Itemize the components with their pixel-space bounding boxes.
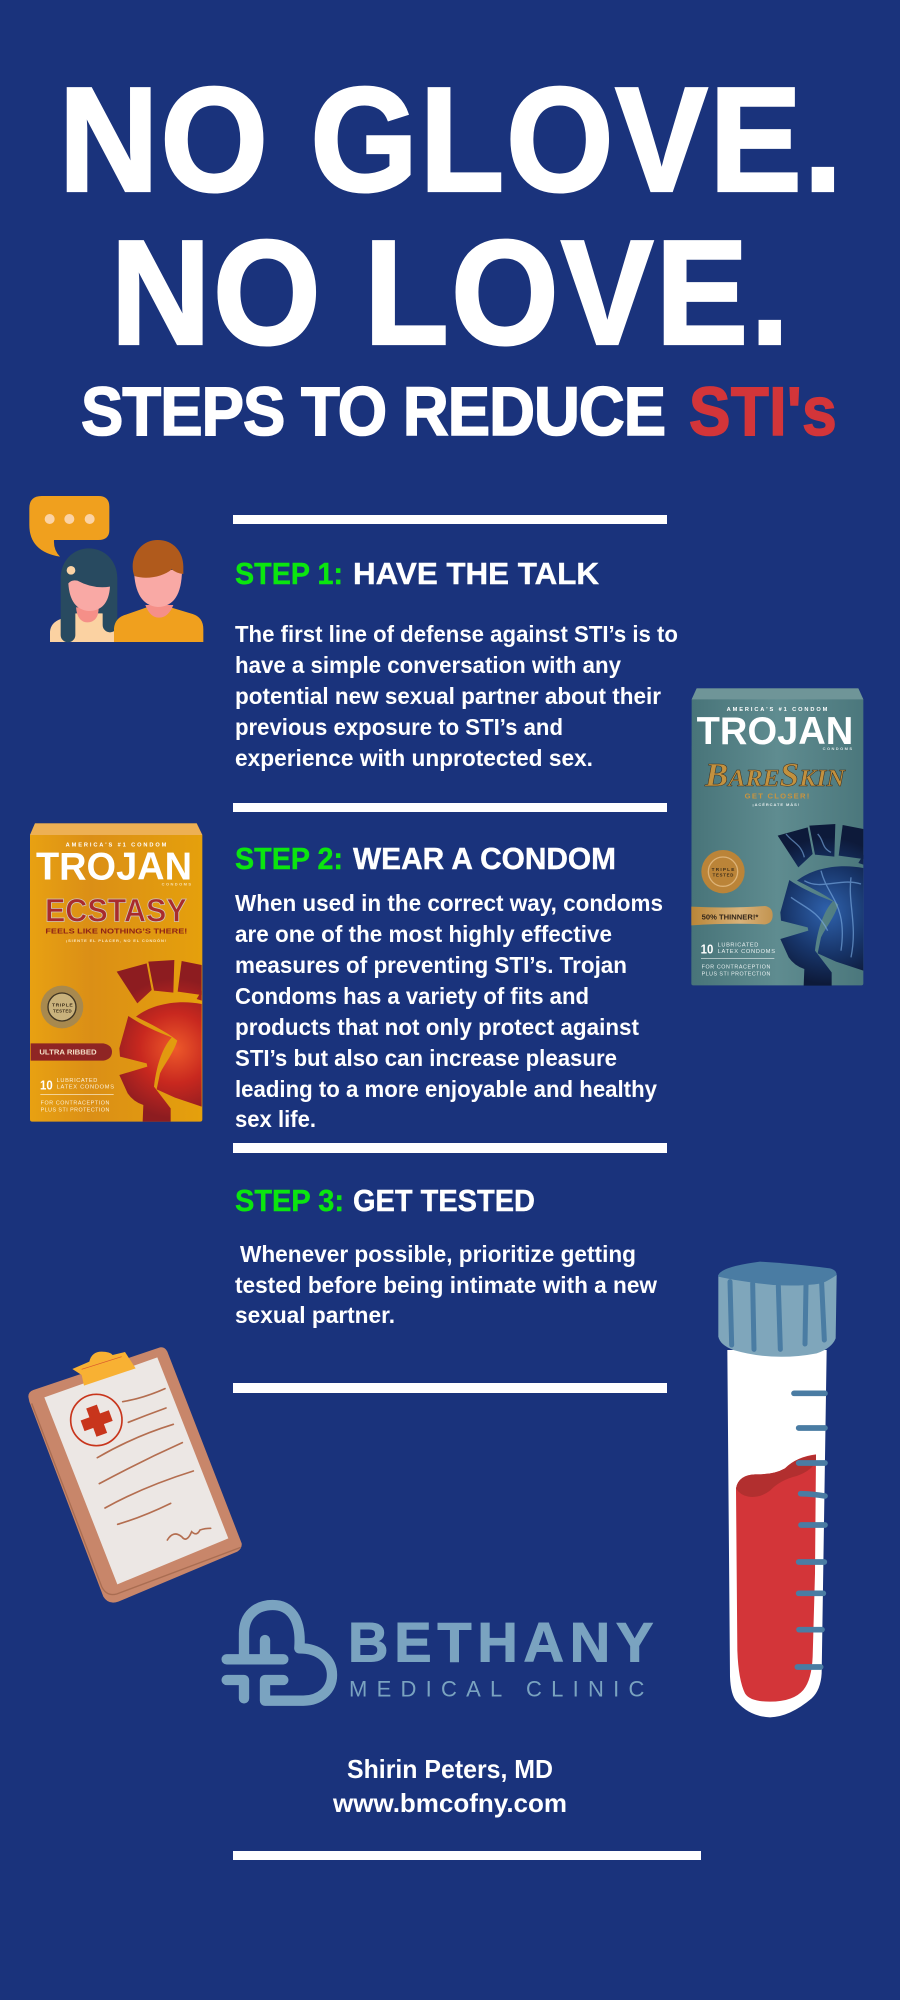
- product: Trojan BareSkin box: 50% THINNER!*: [702, 912, 758, 921]
- step 2 text: products that not only protect against: [235, 1014, 639, 1040]
- product: Trojan Ecstasy box: ECSTASY: [45, 893, 187, 929]
- subtitle: STEPS TO REDUCE: [81, 374, 666, 451]
- step 1 text: [235, 621, 678, 771]
- product: Trojan Ecstasy box: LUBRICATED: [57, 1078, 97, 1084]
- icon: blood test tube: [718, 1262, 837, 1717]
- step 2 heading: STEP 2:: [235, 842, 343, 876]
- product: Trojan BareSkin box: ¡ACÉRCATE MÁS!: [752, 802, 799, 807]
- product: Trojan Ecstasy box: TESTED: [53, 1009, 72, 1014]
- product: Trojan BareSkin box: AMERICA'S #1 CONDOM: [727, 707, 828, 713]
- step 2 text: [235, 890, 663, 1132]
- product: Trojan Ecstasy box: FOR CONTRACEPTION: [41, 1100, 109, 1106]
- product: Trojan Ecstasy box: 10: [40, 1077, 53, 1092]
- step 2 heading: WEAR A CONDOM: [353, 842, 616, 876]
- product: Trojan BareSkin box: 10: [701, 941, 713, 956]
- product: Trojan Ecstasy box: LATEX CONDOMS: [57, 1085, 114, 1091]
- step 1 heading: [235, 557, 599, 591]
- product: Trojan Ecstasy box: TRIPLE: [52, 1003, 73, 1009]
- step 1 heading: HAVE THE TALK: [353, 557, 599, 591]
- contact: www.bmcofny.com: [332, 1788, 567, 1818]
- logo wordmark: BETHANY: [348, 1611, 653, 1674]
- product: Trojan BareSkin box: [691, 688, 863, 986]
- product: Trojan Ecstasy box: [30, 823, 202, 1122]
- man: [114, 540, 203, 642]
- step 1 text: have a simple conversation with any: [235, 652, 621, 678]
- step 3 heading: [235, 1184, 535, 1218]
- icon: two people talking: [29, 496, 203, 642]
- step 3 text: Whenever possible, prioritize getting: [240, 1241, 636, 1267]
- product: Trojan BareSkin box: CONDOMS: [823, 746, 852, 751]
- woman: [50, 548, 117, 642]
- speech bubble: [29, 496, 109, 557]
- product: Trojan BareSkin box: GET CLOSER!: [745, 791, 809, 800]
- logo wordmark: MEDICAL CLINIC: [349, 1677, 644, 1702]
- product: Trojan Ecstasy box: ¡SIENTE EL PLACER, NO EL CONDÓN!: [66, 938, 166, 943]
- step 1 text: previous exposure to STI’s and: [235, 714, 563, 740]
- step 1 text: experience with unprotected sex.: [235, 745, 593, 771]
- step 2 text: STI’s but also can increase pleasure: [235, 1045, 617, 1071]
- step 3 heading: STEP 3:: [235, 1184, 344, 1218]
- product: Trojan BareSkin box: LUBRICATED: [718, 942, 758, 948]
- product: Trojan BareSkin box: BARESKIN: [704, 757, 846, 794]
- step 2 text: Condoms has a variety of fits and: [235, 983, 589, 1009]
- icon: clipboard: [28, 1347, 242, 1603]
- contact: Shirin Peters, MD: [347, 1754, 553, 1784]
- step 1 heading: STEP 1:: [235, 557, 343, 591]
- logo: Bethany Medical Clinic: [227, 1605, 653, 1702]
- product: Trojan Ecstasy box: ULTRA RIBBED: [39, 1048, 97, 1057]
- step 2 text: sex life.: [235, 1106, 316, 1132]
- step 2 text: are one of the most highly effective: [235, 921, 612, 947]
- contact: [332, 1754, 567, 1818]
- title: NO GLOVE.: [59, 58, 842, 223]
- step 1 text: potential new sexual partner about their: [235, 683, 661, 709]
- subtitle: STI's: [689, 373, 837, 450]
- step 3 text: sexual partner.: [235, 1302, 395, 1328]
- product: Trojan Ecstasy box: PLUS STI PROTECTION: [41, 1107, 109, 1113]
- product: Trojan BareSkin box: TRIPLE: [712, 867, 734, 872]
- title: [59, 58, 842, 376]
- logo wordmark: [348, 1611, 653, 1702]
- product: Trojan Ecstasy box: TROJAN: [36, 844, 192, 888]
- product: Trojan Ecstasy box: FEELS LIKE NOTHING’S THERE!: [45, 927, 187, 936]
- product: Trojan Ecstasy box: CONDOMS: [162, 882, 191, 887]
- product: Trojan BareSkin box: TROJAN: [697, 709, 853, 753]
- step 3 text: [235, 1241, 657, 1328]
- product: Trojan BareSkin box: LATEX CONDOMS: [718, 949, 775, 955]
- product: Trojan BareSkin box: PLUS STI PROTECTION: [702, 972, 770, 978]
- step 2 heading: [235, 842, 616, 876]
- step 1 text: The first line of defense against STI’s is to: [235, 621, 678, 647]
- step 2 text: leading to a more enjoyable and healthy: [235, 1076, 657, 1102]
- step 3 heading: GET TESTED: [353, 1184, 535, 1218]
- product: Trojan Ecstasy box: AMERICA'S #1 CONDOM: [66, 843, 167, 849]
- step 3 text: tested before being intimate with a new: [235, 1272, 657, 1298]
- step 2 text: measures of preventing STI’s. Trojan: [235, 952, 627, 978]
- title: NO LOVE.: [111, 211, 789, 376]
- logo mark: [227, 1605, 332, 1701]
- product: Trojan BareSkin box: FOR CONTRACEPTION: [702, 964, 770, 970]
- step 2 text: When used in the correct way, condoms: [235, 890, 663, 916]
- product: Trojan BareSkin box: TESTED: [713, 873, 733, 878]
